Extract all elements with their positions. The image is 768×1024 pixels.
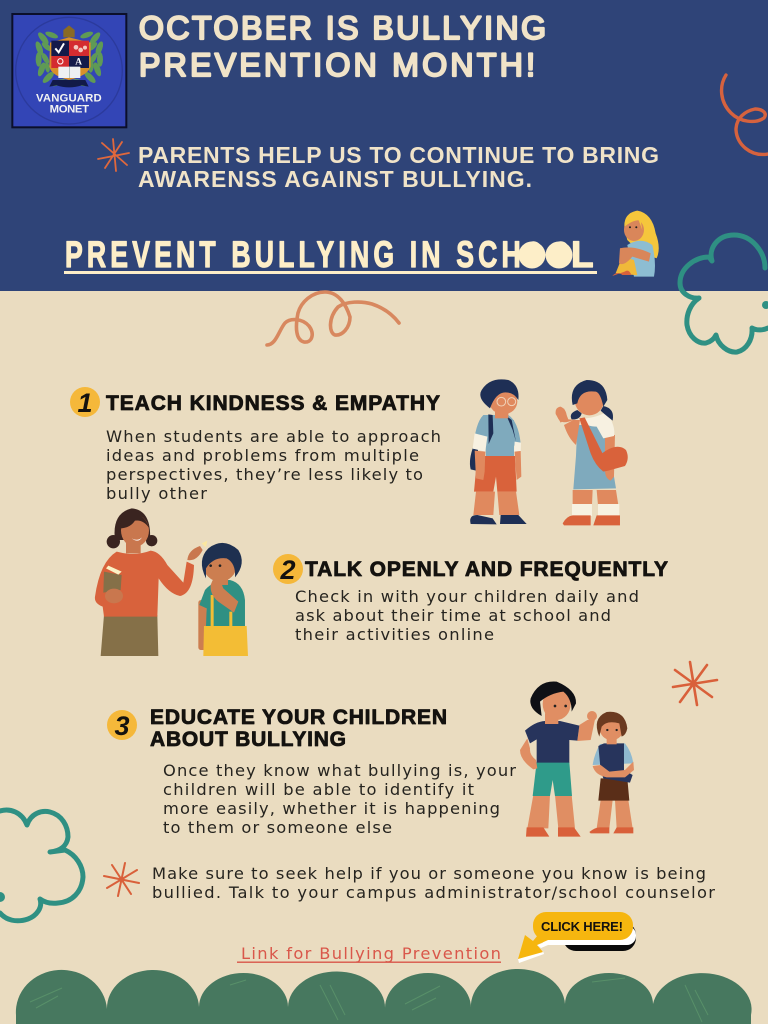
- body text 3: Once they know what bullying is, your: [163, 761, 516, 780]
- logo: Vanguard Monet crest: A: [75, 57, 82, 67]
- small child: [589, 712, 634, 833]
- heading 1: TEACH KINDNESS & EMPATHY: [106, 392, 440, 415]
- body text 2: ask about their time at school and: [295, 606, 611, 625]
- closing note: Make sure to seek help if you or someone you know is being: [152, 864, 706, 883]
- older child: [520, 682, 597, 837]
- closing note: [152, 864, 715, 902]
- child: [198, 543, 248, 656]
- body text 2: [295, 587, 639, 644]
- number badge 2: 2: [279, 555, 296, 585]
- icon: orange star in header: [98, 139, 129, 171]
- body text 3: [163, 761, 516, 837]
- number badge 1: 1: [77, 388, 93, 418]
- click here callout with arrow: CLICK HERE!: [541, 919, 623, 934]
- illustration: two students greeting: [470, 379, 628, 525]
- body text 2: their activities online: [295, 625, 494, 644]
- title: PREVENTION MONTH!: [139, 47, 535, 83]
- decoration: teal cloud bottom left dot: [0, 892, 5, 902]
- number badge 3: 3: [114, 711, 130, 741]
- title: OCTOBER IS BULLYING: [139, 10, 546, 46]
- body text 3: to them or someone else: [163, 818, 392, 837]
- boy: [470, 379, 527, 524]
- icon: orange star middle right: [673, 662, 717, 705]
- illustration: teacher and child: [95, 508, 248, 656]
- click here callout with arrow: [518, 912, 636, 963]
- body text 3: more easily, whether it is happening: [163, 799, 500, 818]
- logo: Vanguard Monet crest: MONET: [50, 104, 89, 116]
- heading: prevent bullying in school: OO: [524, 235, 571, 274]
- number badge 2: [273, 554, 303, 585]
- decoration: teal cloud bottom left: [0, 810, 83, 921]
- logo: Vanguard Monet crest: [12, 14, 126, 127]
- body text 2: Check in with your children daily and: [295, 587, 639, 606]
- title: [139, 10, 546, 83]
- closing note: bullied. Talk to your campus administrator/school counselor: [152, 883, 715, 902]
- link text: Link for Bullying Prevention: [241, 944, 501, 963]
- body text 1: ideas and problems from multiple: [106, 446, 419, 465]
- body text 1: [106, 427, 441, 503]
- heading 3: EDUCATE YOUR CHILDREN: [150, 706, 447, 729]
- heading: prevent bullying in school: L: [571, 234, 594, 275]
- decoration: green scalloped hills: [16, 969, 752, 1024]
- number badge 3: [107, 710, 137, 741]
- decoration: orange squiggle centre: [267, 292, 399, 345]
- subheading: parents message: [138, 142, 659, 192]
- girl: [556, 380, 628, 525]
- logo: Vanguard Monet crest: VANGUARD: [36, 93, 102, 105]
- body text 1: perspectives, they’re less likely to: [106, 465, 423, 484]
- panel: navy header band: [0, 0, 768, 291]
- body text 1: bully other: [106, 484, 207, 503]
- heading 3: ABOUT BULLYING: [150, 728, 346, 751]
- body text 3: children will be able to identify it: [163, 780, 474, 799]
- heading 2: TALK OPENLY AND FREQUENTLY: [305, 558, 668, 581]
- section 1: teach kindness: [70, 387, 441, 503]
- teacher: [95, 508, 207, 656]
- subheading: parents message: PARENTS HELP US TO CONTINUE TO BRING: [138, 142, 659, 168]
- decoration: teal cloud top right: [680, 235, 768, 352]
- section 3: educate your children: [107, 706, 516, 837]
- subheading: parents message: AWARENSS AGAINST BULLYING.: [138, 166, 532, 192]
- decoration: teal cloud dot: [762, 301, 768, 309]
- number badge 1: [70, 387, 100, 418]
- section 2: talk openly: [273, 554, 668, 644]
- heading: prevent bullying in school: PREVENT BULLYING IN SCH: [65, 234, 521, 275]
- illustration: older child and small child: [520, 682, 634, 837]
- heading 3: [150, 706, 447, 751]
- icon: orange star near closing note: [104, 863, 139, 896]
- illustration: sad girl sitting: [612, 211, 659, 277]
- body text 1: When students are able to approach: [106, 427, 441, 446]
- decoration: orange squiggle top right: [722, 75, 768, 154]
